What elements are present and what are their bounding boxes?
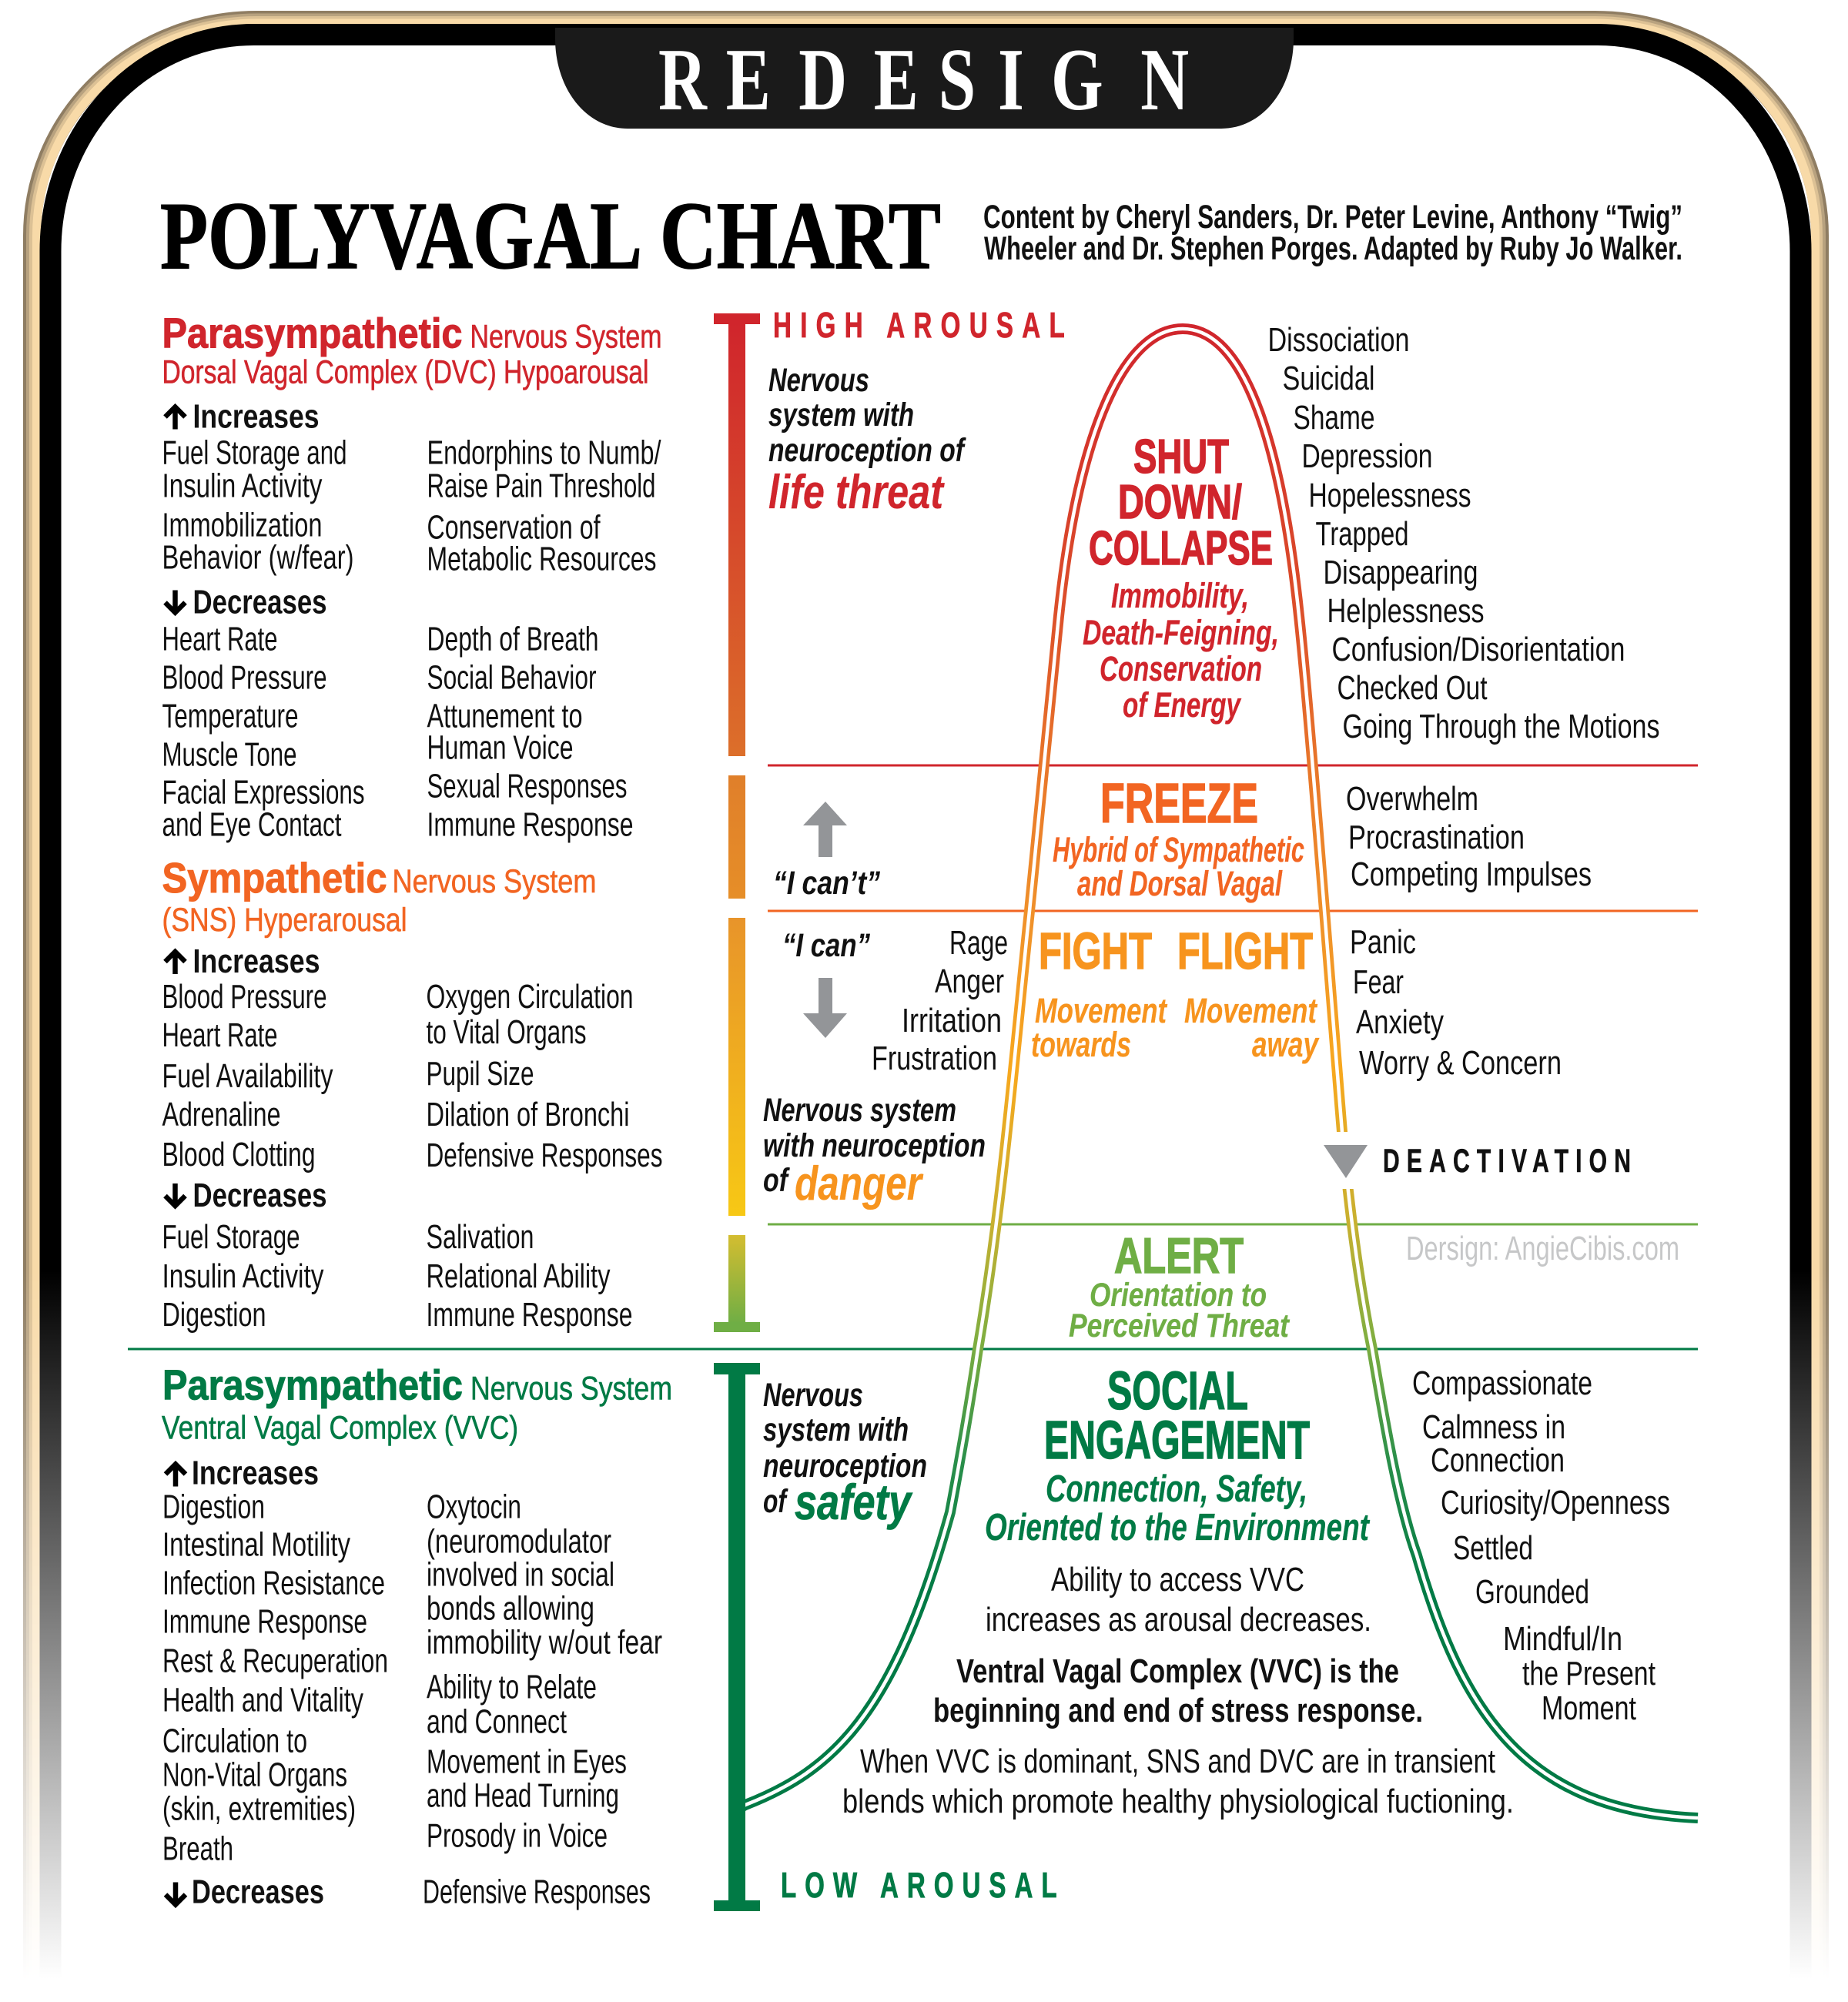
increases list: Oxygen Circulation bbox=[427, 979, 633, 1016]
zone: shut down collapse: of Energy bbox=[1123, 685, 1241, 725]
increases label: Increases bbox=[192, 1454, 319, 1492]
list: social engagement qualities: Curiosity/Openness bbox=[1441, 1485, 1670, 1522]
zone: shut down collapse: DOWN/ bbox=[1118, 476, 1242, 529]
callout: neuroception of safety: safety bbox=[795, 1474, 912, 1530]
zone: fight: FIGHT bbox=[1039, 922, 1152, 980]
increases list: (skin, extremities) bbox=[162, 1791, 356, 1828]
heading: parasympathetic VVC bbox=[162, 1361, 672, 1446]
increases list: Health and Vitality bbox=[162, 1682, 363, 1719]
zone: flight bbox=[1177, 922, 1320, 1064]
list: shut down symptoms: Dissociation bbox=[1267, 322, 1409, 359]
increases label bbox=[166, 1454, 319, 1492]
zone: fight: towards bbox=[1031, 1025, 1131, 1064]
fight symptoms list: Anger bbox=[935, 963, 1004, 1000]
decreases list: Immune Response bbox=[427, 807, 633, 844]
decreases list: Heart Rate bbox=[162, 621, 277, 658]
increases list: Blood Clotting bbox=[162, 1137, 316, 1173]
increases list: Intestinal Motility bbox=[162, 1526, 350, 1563]
zone: shut down collapse bbox=[1083, 430, 1279, 725]
zone: alert: ALERT bbox=[1114, 1227, 1244, 1284]
panel: dorsal vagal complex bbox=[162, 310, 662, 844]
increases label bbox=[165, 942, 320, 980]
list: flight symptoms: Fear bbox=[1353, 964, 1404, 1001]
title: CHART bbox=[660, 183, 941, 290]
decreases list: Insulin Activity bbox=[162, 1258, 324, 1295]
list: flight symptoms: Panic bbox=[1350, 924, 1416, 961]
decreases list: Salivation bbox=[427, 1219, 534, 1256]
callout: neuroception of life threat: neuroception of bbox=[768, 432, 966, 469]
decreases list: Fuel Storage bbox=[162, 1219, 300, 1256]
zone: social engagement: ENGAGEMENT bbox=[1044, 1410, 1310, 1470]
decreases list bbox=[162, 1219, 633, 1334]
increases list: Movement in Eyes bbox=[427, 1743, 627, 1780]
increases list bbox=[162, 434, 661, 578]
increases list: (neuromodulator bbox=[427, 1523, 611, 1560]
byline credits bbox=[983, 199, 1682, 267]
zone: shut down collapse: SHUT bbox=[1133, 430, 1229, 484]
divider: green section line bbox=[128, 1348, 1698, 1351]
list: shut down symptoms: Disappearing bbox=[1323, 554, 1478, 591]
decreases row: Decreases bbox=[192, 1873, 324, 1911]
increases list: and Connect bbox=[427, 1703, 567, 1740]
bell curve: double line bbox=[735, 329, 1698, 1818]
zone: fight bbox=[1031, 922, 1168, 1064]
increases list: Blood Pressure bbox=[162, 979, 326, 1016]
list: flight symptoms bbox=[1350, 924, 1562, 1082]
increases list: Immune Response bbox=[162, 1603, 367, 1640]
increases list: Infection Resistance bbox=[162, 1565, 385, 1602]
list: shut down symptoms: Depression bbox=[1301, 438, 1432, 475]
zone: social engagement: Oriented to the Environment bbox=[985, 1507, 1370, 1548]
decreases list: Temperature bbox=[162, 698, 299, 735]
fight symptoms list: Frustration bbox=[872, 1040, 997, 1077]
zone: alert: Orientation to bbox=[1090, 1277, 1267, 1314]
zone: freeze: Hybrid of Sympathetic bbox=[1053, 830, 1304, 869]
increases list: Non-Vital Organs bbox=[162, 1757, 347, 1794]
zone: freeze: FREEZE bbox=[1100, 773, 1258, 835]
decreases list: Muscle Tone bbox=[162, 736, 297, 773]
increases list: Rest & Recuperation bbox=[162, 1643, 388, 1680]
text block: VVC explanation: Ventral Vagal Complex (VVC) is the bbox=[956, 1652, 1399, 1690]
increases list: Dilation of Bronchi bbox=[427, 1096, 630, 1133]
increases list bbox=[162, 979, 662, 1174]
increases list: Raise Pain Threshold bbox=[427, 468, 656, 505]
increases list: Endorphins to Numb/ bbox=[427, 434, 661, 471]
callout: neuroception of life threat: life threat bbox=[768, 466, 945, 519]
list: freeze symptoms: Procrastination bbox=[1348, 819, 1525, 856]
zone: social engagement bbox=[985, 1361, 1370, 1548]
increases list: Pupil Size bbox=[427, 1056, 534, 1093]
list: shut down symptoms: Hopelessness bbox=[1309, 477, 1471, 514]
increases list: immobility w/out fear bbox=[427, 1625, 662, 1662]
zone lines bbox=[768, 764, 1698, 1226]
heading: sympathetic SNS: Nervous System bbox=[393, 863, 596, 900]
increases list: Immobilization bbox=[162, 507, 322, 544]
list: shut down symptoms bbox=[1267, 322, 1660, 745]
fight symptoms list: Rage bbox=[949, 925, 1008, 962]
decreases list: Social Behavior bbox=[427, 659, 596, 696]
callout: neuroception of safety: neuroception bbox=[763, 1448, 927, 1485]
increases list: Oxytocin bbox=[427, 1489, 521, 1526]
list: social engagement qualities: Calmness in bbox=[1422, 1409, 1565, 1446]
callout: neuroception of danger: with neuroception bbox=[763, 1127, 986, 1164]
title: POLYVAGAL bbox=[160, 183, 642, 290]
list: shut down symptoms: Confusion/Disorientation bbox=[1332, 631, 1625, 668]
decreases list: Blood Pressure bbox=[162, 659, 326, 696]
zone: freeze bbox=[1053, 773, 1304, 903]
increases label bbox=[165, 397, 319, 436]
designer credit: Dersign: AngieCibis.com bbox=[1406, 1230, 1679, 1267]
zone: shut down collapse: Conservation bbox=[1100, 649, 1262, 688]
increases list: Insulin Activity bbox=[162, 468, 323, 505]
heading: sympathetic SNS: (SNS) Hyperarousal bbox=[162, 902, 407, 939]
text block: VVC explanation: blends which promote healthy physiological fuctioning. bbox=[842, 1783, 1514, 1820]
decreases list: Facial Expressions bbox=[162, 775, 365, 812]
heading: parasympathetic VVC: Ventral Vagal Complex (VVC) bbox=[162, 1409, 518, 1446]
list: shut down symptoms: Suicidal bbox=[1283, 360, 1375, 397]
list: social engagement qualities: Compassionate bbox=[1412, 1365, 1592, 1402]
HIGH AROUSAL label: HIGH AROUSAL bbox=[773, 306, 1065, 345]
decreases list: Immune Response bbox=[427, 1297, 633, 1334]
LOW AROUSAL label: LOW AROUSAL bbox=[781, 1866, 1057, 1905]
list: social engagement qualities bbox=[1412, 1365, 1670, 1727]
increases list: and Head Turning bbox=[427, 1777, 619, 1814]
zone: flight: Movement bbox=[1184, 991, 1318, 1030]
callout: neuroception of danger: Nervous system bbox=[763, 1092, 956, 1129]
text block: VVC explanation: When VVC is dominant, SNS and DVC are in transient bbox=[860, 1743, 1495, 1780]
fight symptoms list: Irritation bbox=[902, 1003, 1002, 1040]
increases list: Defensive Responses bbox=[427, 1137, 662, 1174]
heading: parasympathetic VVC: Nervous System bbox=[470, 1371, 672, 1408]
decreases list: Digestion bbox=[162, 1297, 266, 1334]
heading: parasympathetic DVC: Dorsal Vagal Complex (DVC) Hypoarousal bbox=[162, 354, 648, 391]
callout: neuroception of safety: Nervous bbox=[763, 1377, 863, 1414]
increases list: to Vital Organs bbox=[427, 1014, 587, 1051]
callout: neuroception of safety bbox=[763, 1377, 927, 1530]
header tab: REDESIGN bbox=[555, 28, 1294, 129]
callout: neuroception of life threat bbox=[768, 362, 966, 519]
text block: VVC explanation bbox=[842, 1562, 1514, 1820]
increases list: Fuel Availability bbox=[162, 1058, 333, 1095]
increases list: Breath bbox=[162, 1831, 233, 1868]
increases list: bonds allowing bbox=[427, 1591, 594, 1628]
icon: deactivation triangle and label: DEACTIVATION bbox=[1383, 1142, 1631, 1179]
decreases list: Human Voice bbox=[427, 730, 573, 767]
list: freeze symptoms bbox=[1346, 781, 1592, 893]
text block: VVC explanation: Ability to access VVC bbox=[1051, 1562, 1304, 1599]
icon: down arrow with I can: “I can” bbox=[782, 927, 870, 964]
zone: shut down collapse: Death-Feigning, bbox=[1083, 613, 1279, 652]
zone: alert: Perceived Threat bbox=[1069, 1307, 1290, 1344]
heading: parasympathetic VVC: Parasympathetic bbox=[162, 1361, 463, 1409]
decreases list: Sexual Responses bbox=[427, 768, 627, 805]
icon: up arrow with I can't: “I can’t” bbox=[773, 865, 880, 902]
increases list: Prosody in Voice bbox=[427, 1817, 608, 1854]
decreases list: Attunement to bbox=[427, 698, 582, 735]
list: freeze symptoms: Overwhelm bbox=[1346, 781, 1478, 818]
increases list bbox=[162, 1489, 662, 1868]
increases list: involved in social bbox=[427, 1557, 614, 1594]
zone: shut down collapse: Immobility, bbox=[1111, 576, 1249, 615]
list: social engagement qualities: Connection bbox=[1431, 1442, 1565, 1479]
decreases label bbox=[165, 1177, 326, 1214]
panel: sympathetic nervous system bbox=[162, 854, 662, 1334]
fight symptoms list bbox=[872, 925, 1008, 1077]
icon: up arrow with I can't bbox=[773, 802, 880, 902]
list: shut down symptoms: Going Through the Motions bbox=[1343, 708, 1660, 745]
list: social engagement qualities: Moment bbox=[1542, 1690, 1636, 1727]
increases list: Adrenaline bbox=[162, 1096, 280, 1133]
zone: social engagement: Connection, Safety, bbox=[1046, 1468, 1307, 1510]
increases list: Metabolic Resources bbox=[427, 541, 656, 578]
callout: neuroception of safety: of bbox=[763, 1483, 788, 1520]
list: social engagement qualities: Grounded bbox=[1475, 1574, 1589, 1611]
arousal bar: green ventral bbox=[714, 1363, 760, 1911]
text block: VVC explanation: increases as arousal decreases. bbox=[986, 1602, 1371, 1639]
zone: flight: away bbox=[1252, 1025, 1320, 1064]
decreases list: Relational Ability bbox=[427, 1258, 611, 1295]
increases list: Fuel Storage and bbox=[162, 434, 346, 471]
callout: neuroception of danger bbox=[763, 1092, 986, 1210]
list: shut down symptoms: Helplessness bbox=[1327, 593, 1485, 630]
list: shut down symptoms: Checked Out bbox=[1337, 670, 1488, 707]
panel: ventral vagal complex bbox=[162, 1361, 672, 1911]
increases list: Ability to Relate bbox=[427, 1669, 597, 1706]
text block: VVC explanation: beginning and end of stress response. bbox=[933, 1692, 1423, 1729]
increases list: Digestion bbox=[162, 1489, 265, 1526]
list: flight symptoms: Anxiety bbox=[1356, 1004, 1444, 1041]
list: social engagement qualities: Mindful/In bbox=[1503, 1621, 1622, 1658]
increases label: Increases bbox=[192, 942, 320, 980]
increases list: Heart Rate bbox=[162, 1017, 277, 1054]
decreases list: Depth of Breath bbox=[427, 621, 599, 658]
callout: neuroception of danger: of bbox=[763, 1162, 790, 1199]
zone: freeze: and Dorsal Vagal bbox=[1077, 864, 1283, 903]
decreases row bbox=[166, 1873, 651, 1911]
decreases label: Decreases bbox=[192, 1177, 326, 1214]
increases list: Circulation to bbox=[162, 1723, 307, 1760]
increases label: Increases bbox=[192, 397, 319, 436]
zone: fight: Movement bbox=[1035, 991, 1168, 1030]
header tab: REDESIGN: REDESIGN bbox=[658, 31, 1189, 129]
zone: shut down collapse: COLLAPSE bbox=[1089, 522, 1273, 575]
heading: sympathetic SNS: Sympathetic bbox=[162, 854, 387, 902]
list: shut down symptoms: Trapped bbox=[1315, 516, 1409, 553]
callout: neuroception of danger: danger bbox=[795, 1157, 923, 1210]
increases list: Conservation of bbox=[427, 510, 601, 547]
list: freeze symptoms: Competing Impulses bbox=[1351, 856, 1592, 893]
callout: neuroception of life threat: Nervous bbox=[768, 362, 869, 399]
decreases list bbox=[162, 621, 633, 844]
decreases label: Decreases bbox=[192, 584, 326, 621]
decreases label bbox=[165, 584, 326, 621]
heading: parasympathetic DVC bbox=[162, 310, 662, 391]
decreases row: Defensive Responses bbox=[423, 1874, 651, 1911]
zone: flight: FLIGHT bbox=[1177, 922, 1313, 980]
heading: sympathetic SNS bbox=[162, 854, 596, 939]
list: social engagement qualities: the Present bbox=[1522, 1656, 1656, 1692]
callout: neuroception of safety: system with bbox=[763, 1411, 909, 1448]
increases list: Behavior (w/fear) bbox=[162, 539, 354, 576]
zone: alert bbox=[1069, 1227, 1290, 1344]
callout: neuroception of life threat: system with bbox=[768, 397, 914, 434]
list: shut down symptoms: Shame bbox=[1294, 400, 1375, 437]
zone: social engagement: SOCIAL bbox=[1107, 1361, 1248, 1421]
list: flight symptoms: Worry & Concern bbox=[1359, 1045, 1562, 1082]
arousal bar: upper gradient bbox=[714, 313, 760, 1332]
list: social engagement qualities: Settled bbox=[1453, 1530, 1533, 1567]
heading: parasympathetic DVC: Parasympathetic bbox=[162, 310, 462, 357]
icon: down arrow with I can bbox=[782, 927, 870, 1038]
heading: parasympathetic DVC: Nervous System bbox=[470, 319, 662, 356]
decreases list: and Eye Contact bbox=[162, 807, 342, 844]
